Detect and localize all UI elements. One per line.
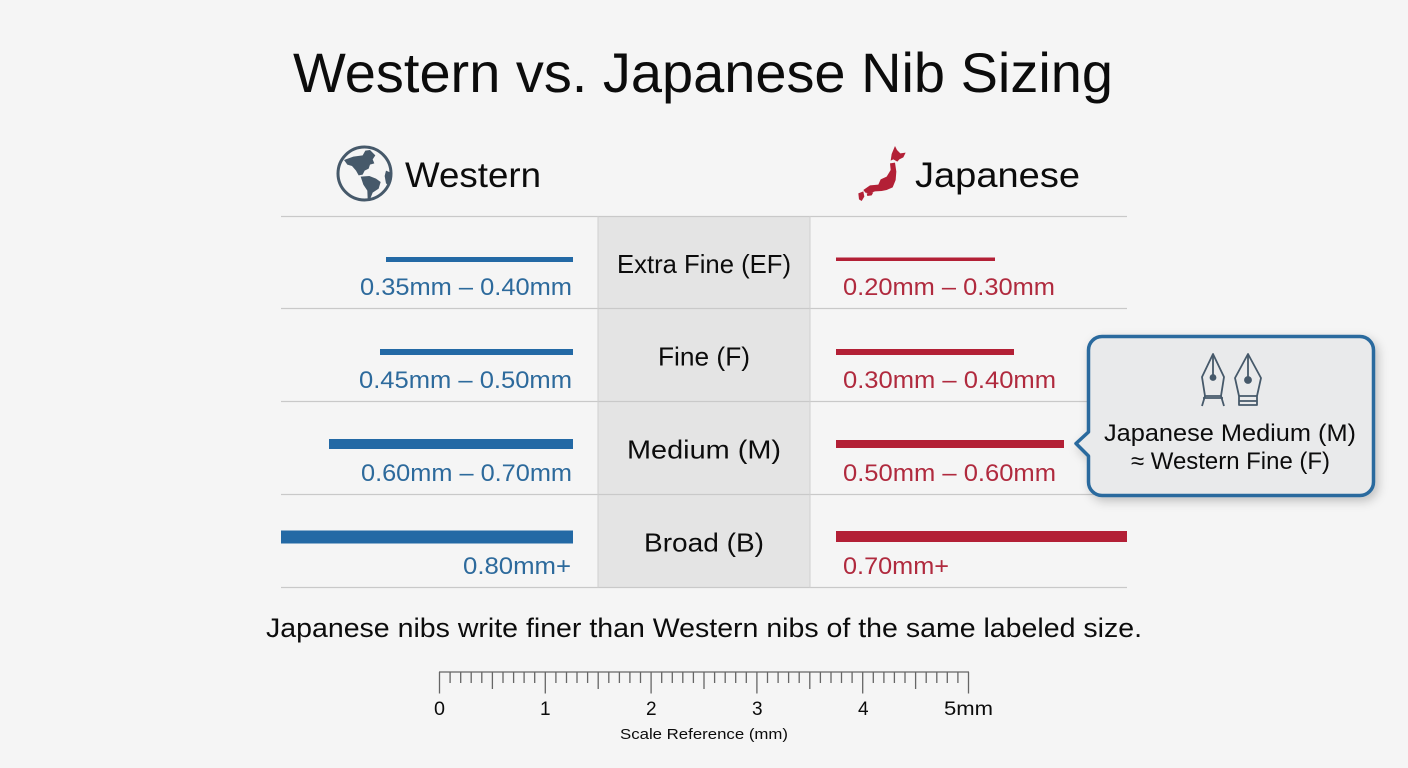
western bar M [329, 439, 573, 449]
scale numbers: 3 [752, 699, 763, 720]
japanese bar F [836, 349, 1014, 355]
japanese range B: 0.70mm+ [843, 553, 949, 580]
western range F: 0.45mm – 0.50mm [359, 367, 572, 394]
scale numbers: 2 [646, 699, 657, 720]
western bar B [281, 530, 573, 544]
callout: Japanese Medium equals Western Fine [1076, 336, 1374, 496]
scale numbers [434, 699, 993, 720]
western bar EF [386, 257, 573, 262]
japanese bar B [836, 531, 1127, 542]
scale numbers: 4 [858, 699, 869, 720]
size label EF: Extra Fine (EF) [617, 249, 791, 279]
japanese bar M [836, 440, 1064, 448]
row: Extra Fine [360, 249, 1055, 301]
western range EF: 0.35mm – 0.40mm [360, 274, 572, 301]
western range B: 0.80mm+ [463, 553, 571, 580]
scale numbers: 0 [434, 699, 445, 720]
scale caption: Scale Reference (mm) [620, 726, 788, 743]
japanese range EF: 0.20mm – 0.30mm [843, 274, 1055, 301]
western bar F [380, 349, 573, 355]
callout text: Japanese Medium (M) [1104, 420, 1356, 447]
center column background [598, 216, 810, 588]
japanese bar EF [836, 258, 995, 261]
column header: Japanese [858, 146, 1080, 201]
summary caption: Japanese nibs write finer than Western nibs of the same labeled size. [266, 613, 1142, 643]
row: Broad [281, 528, 1127, 580]
callout box [1076, 336, 1374, 496]
icon: map of Japan [858, 146, 906, 201]
heading: Japanese: Japanese [915, 156, 1080, 195]
title: Western vs. Japanese Nib Sizing [293, 41, 1113, 104]
scale numbers: 5mm [944, 699, 993, 720]
icon: wide nib [1235, 354, 1261, 405]
western range M: 0.60mm – 0.70mm [361, 460, 572, 487]
row: Medium [329, 434, 1064, 487]
scale numbers: 1 [540, 699, 551, 720]
scale ruler [434, 672, 993, 743]
comparison table [281, 216, 1127, 588]
icon: globe [338, 147, 392, 200]
heading: Western: Western [405, 156, 541, 195]
size label F: Fine (F) [658, 342, 750, 372]
row: Fine [359, 342, 1056, 394]
size label M: Medium (M) [627, 434, 781, 464]
column header: Western [338, 147, 541, 200]
callout text line 2: ≈ Western Fine (F) [1131, 448, 1330, 475]
ruler ticks [439, 672, 969, 694]
japanese range F: 0.30mm – 0.40mm [843, 367, 1056, 394]
japanese range M: 0.50mm – 0.60mm [843, 460, 1056, 487]
icon: narrow nib [1202, 354, 1224, 406]
size label B: Broad (B) [644, 528, 764, 558]
